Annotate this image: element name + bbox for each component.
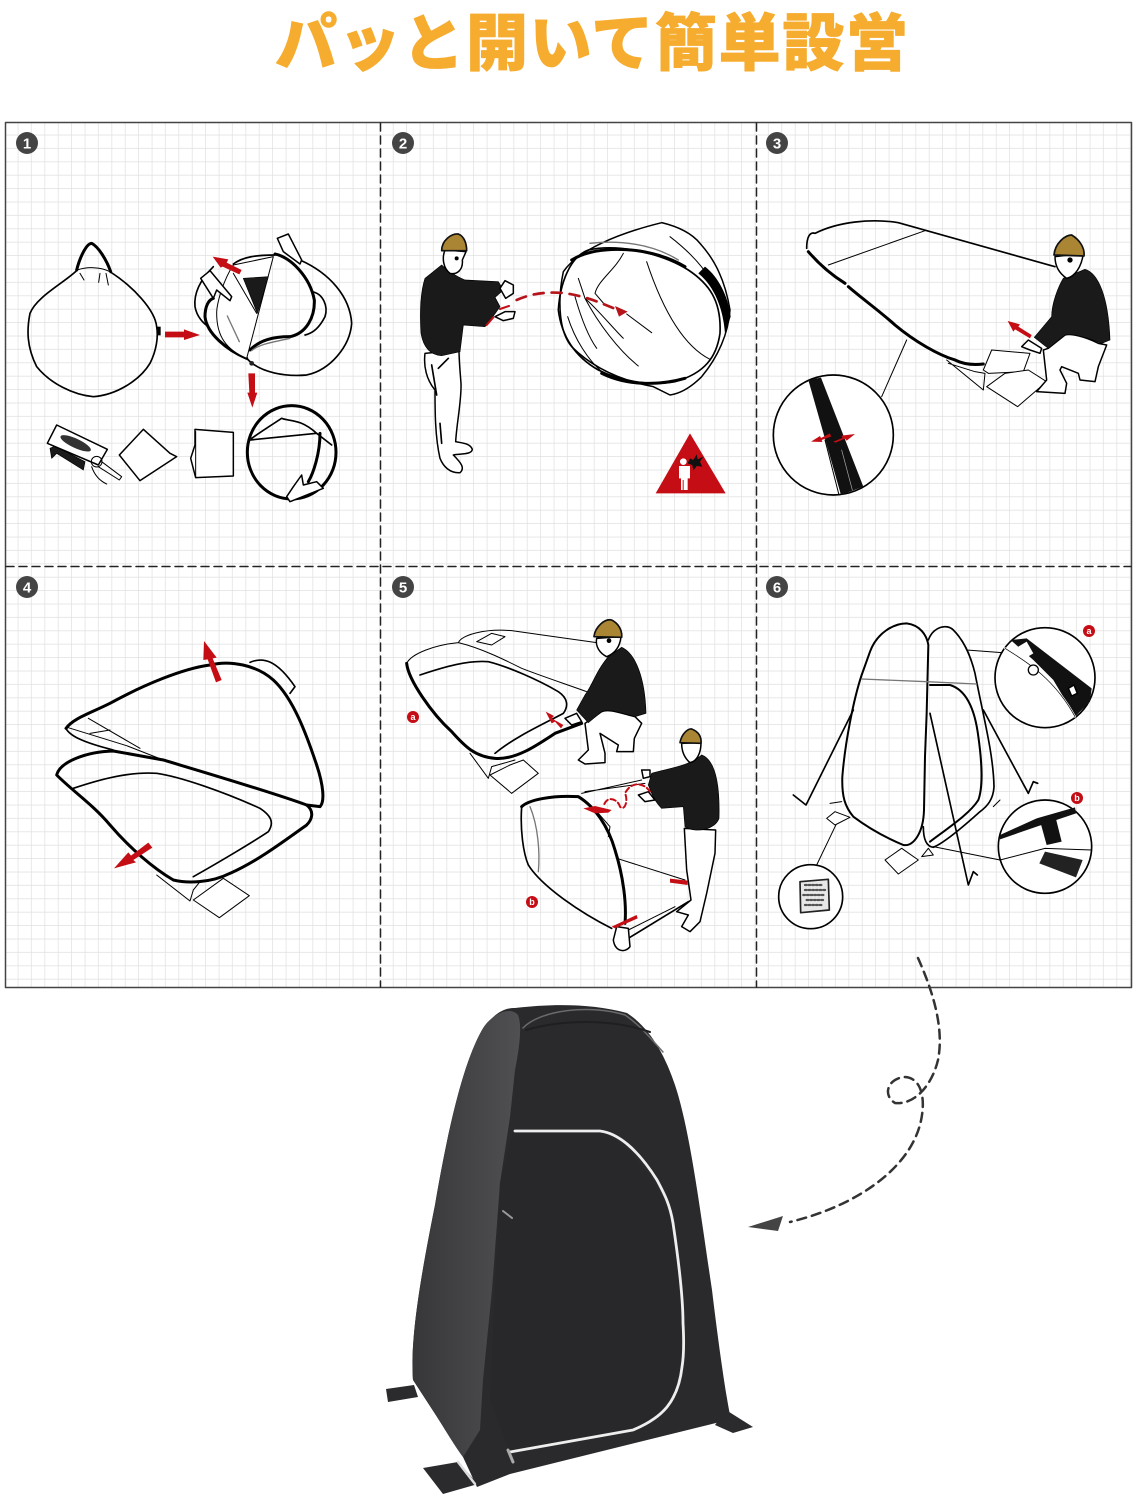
- ground flaps: [386, 1385, 418, 1402]
- arrows: red motion marks: [583, 784, 688, 928]
- arrow: red down-left: [114, 843, 152, 868]
- label b: [526, 896, 538, 908]
- arrow: red down: [247, 373, 257, 408]
- icon: tent lifted flat: [807, 221, 1055, 407]
- icon: stored pack: [47, 425, 122, 484]
- step number 6: 6: [773, 580, 781, 596]
- label b: [1071, 792, 1083, 804]
- photo: black pop-up tent: [386, 1005, 753, 1494]
- step 5 drawings: [407, 620, 719, 951]
- icon: folded sheet: [119, 429, 177, 481]
- arrow: red pull left: [1008, 321, 1032, 338]
- label b: b: [1074, 793, 1080, 803]
- icon: tent folded into two loops: [57, 660, 323, 918]
- label a: a: [410, 712, 416, 722]
- icon: warning triangle: [656, 433, 726, 493]
- icon: standing person bottom: [638, 729, 719, 932]
- icon: ring folded: [247, 406, 336, 502]
- panel: step 5: [392, 576, 719, 951]
- step number 3: 3: [773, 136, 781, 152]
- icon: folded booklet: [191, 429, 233, 478]
- icon: opened pop-up ring: [558, 223, 731, 395]
- panel: step 4: [16, 576, 323, 918]
- step number 4: [16, 576, 38, 598]
- icon: closed round tent bag: [28, 243, 161, 397]
- arrow: red up-left: [213, 257, 242, 274]
- icon: tent partly raised: [407, 630, 597, 793]
- panel: step 1: [16, 132, 352, 502]
- left side panel: [412, 1011, 520, 1457]
- callout: label patch: [779, 865, 843, 929]
- callout b: velcro: [998, 800, 1092, 893]
- label a: a: [1086, 626, 1092, 636]
- label a: [407, 711, 419, 723]
- arrow: dashed looping arrow to tent: [748, 958, 940, 1231]
- icon: tent lifted side: [521, 780, 688, 951]
- step 1 upper drawings: [28, 234, 352, 408]
- panel: step 3: [766, 132, 1110, 495]
- step number 1: 1: [23, 136, 31, 152]
- step 4 drawings: [57, 641, 323, 918]
- step 3 drawings: [773, 221, 1110, 495]
- step number 6: [766, 576, 788, 598]
- arrow: red pull: [546, 712, 563, 728]
- arrow: red dashed motion: [517, 293, 628, 317]
- zipper pull: [503, 1211, 512, 1218]
- step number 5: 5: [399, 580, 407, 596]
- step number 2: [392, 132, 414, 154]
- front panel top seam: [523, 1009, 663, 1052]
- step number 2: 2: [399, 136, 407, 152]
- callout: pole zoom: [773, 375, 893, 495]
- step number 3: [766, 132, 788, 154]
- icon: opening bag with hands: [195, 234, 352, 375]
- door panel: [490, 1131, 683, 1452]
- step 2 drawings: [420, 223, 731, 493]
- step 1 lower drawings: [47, 406, 336, 502]
- step 6 drawings: [779, 623, 1095, 929]
- label a: [1083, 625, 1095, 637]
- panel: step 6: [766, 576, 1095, 929]
- icon: standing person: [420, 234, 515, 473]
- icon: crouching person: [1022, 235, 1110, 393]
- panel: step 2: [392, 132, 731, 493]
- door zipper white: [510, 1131, 684, 1452]
- label b: b: [529, 897, 535, 907]
- panel: instruction grid frame: [6, 122, 1132, 988]
- step number 1: [16, 132, 38, 154]
- arrow: red up: [203, 641, 222, 682]
- arrow: red right: [165, 329, 200, 340]
- step number 4: 4: [23, 580, 32, 596]
- icon: erected tent outline: [793, 623, 1038, 885]
- tent body: [412, 1005, 730, 1487]
- callout a: zipper: [995, 628, 1095, 728]
- step number 5: [392, 576, 414, 598]
- icon: crouching person top: [565, 620, 646, 764]
- title: パッと開いて簡単設営: [275, 10, 908, 79]
